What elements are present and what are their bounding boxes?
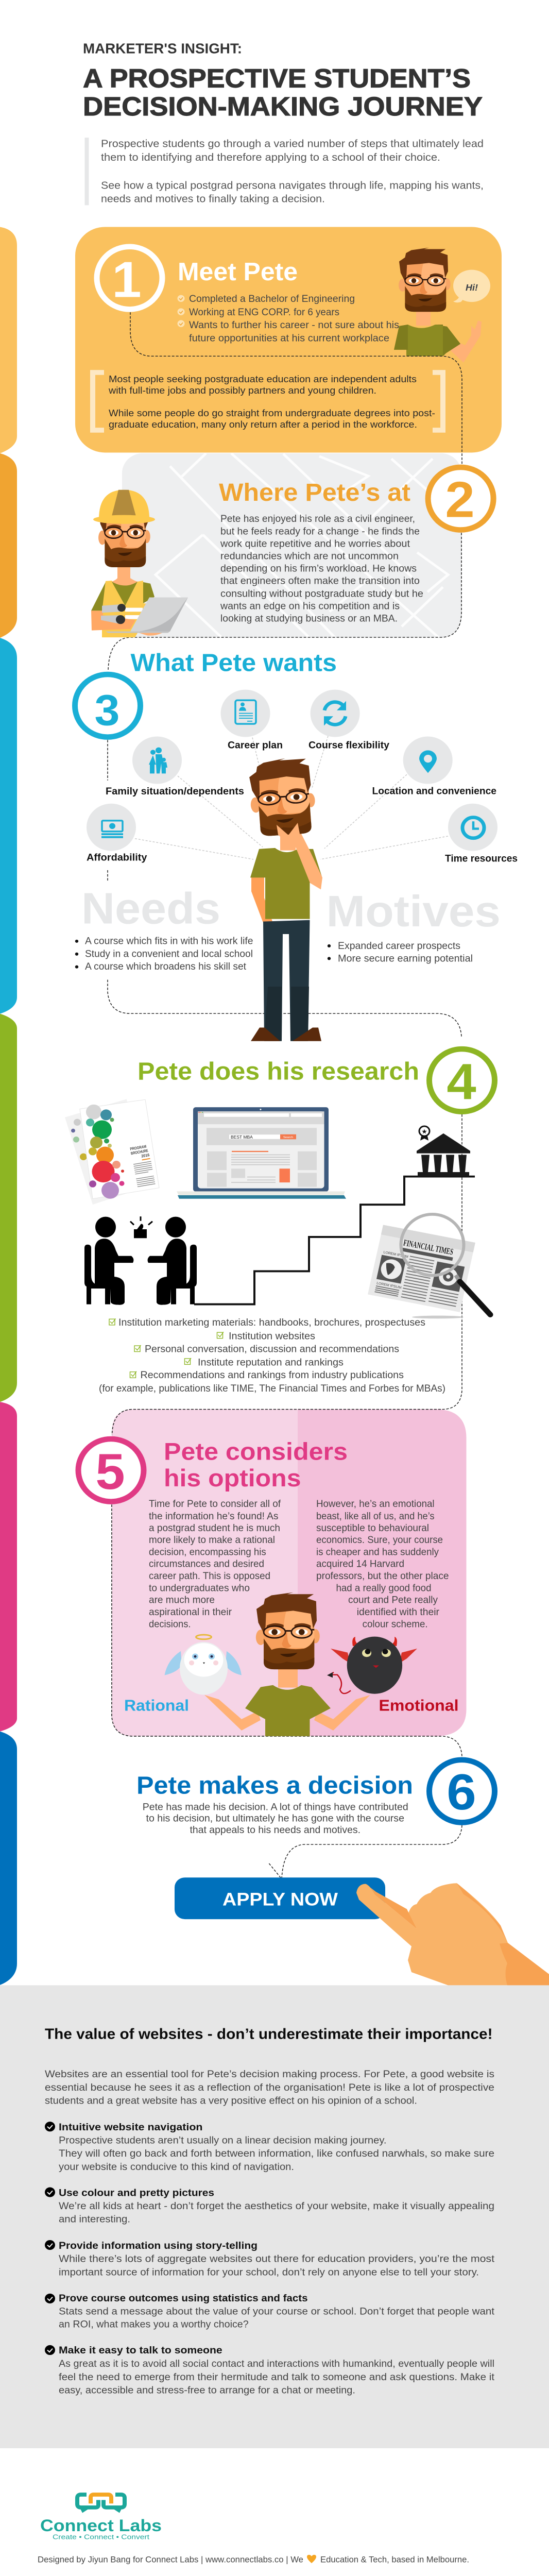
emotional text column [316,1498,449,1630]
item: statistics and facts: Stats send a message about the value of your course or school. Don’t forget that people want [59,2306,495,2317]
side tab: step 3 [0,638,17,1014]
rational text column: the information he’s found! As [149,1511,279,1522]
rational text column: decisions. [149,1619,191,1630]
label: emotional: Emotional [379,1697,459,1714]
motives list: Expanded career prospects [338,941,460,952]
brochure illustration [65,1099,159,1205]
research checklist: Institution marketing materials: handbooks, brochures, prospectuses [118,1317,425,1328]
step 6 badge [430,1760,494,1822]
side tab: step 4 [0,1014,17,1402]
item: talk to someone: Make it easy to talk to someone [59,2345,222,2356]
stairs line [194,1177,475,1304]
heading: where pete's at: Where Pete’s at [219,479,410,506]
item: intuitive navigation [45,2122,494,2173]
heading: pete considers his options [164,1439,348,1492]
emotional text column: professors, but the other place [316,1570,449,1582]
step 6 body text: Pete has made his decision. A lot of things have contributed [143,1802,408,1812]
apply now button [175,1877,385,1919]
main title [83,64,483,121]
emotional text column: had a really good food [336,1583,432,1594]
heading: pete makes a decision: Pete makes a decision [136,1772,413,1799]
institution building icon [417,1126,470,1177]
heading: pete does his research: Pete does his research [138,1058,419,1085]
step 2 body text: redundancies which are not uncommon [220,551,399,562]
pete facts list: future opportunities at his current workplace [189,333,389,344]
connector lines to wants [135,736,448,859]
heading: motives: Motives [327,887,501,936]
pete balancing illustration [204,1592,370,1736]
research checklist: Institute reputation and rankings [198,1357,344,1368]
speech bubble: Hi! [466,282,478,293]
rational text column: to undergraduates who [149,1583,250,1594]
institution building icon: ★ [421,1128,427,1135]
bracketed note: While some people do go straight from undergraduate degrees into post- [109,408,435,419]
heading: pete considers his options: his options [164,1465,301,1492]
laptop illustration: Search [283,1136,293,1139]
pointing hand [356,1883,549,1985]
step 4 badge: 4 [447,1054,476,1110]
intro text block [84,138,484,205]
side tab: step 1 [0,227,17,453]
emotional text column: court and Pete really [348,1595,438,1606]
panel: step 1 meet pete [75,227,502,452]
item: colour and pictures: Use colour and pretty pictures [59,2188,214,2198]
standing pete illustration [248,756,322,1041]
angel creature [165,1635,242,1694]
item: story-telling: While there’s lots of aggregate websites out there for education providers, you’re the most [59,2253,495,2264]
heading: needs: Needs [81,884,220,933]
item: story-telling: Provide information using story-telling [59,2241,258,2251]
intro text block: needs and motives to finally taking a decision. [101,193,325,205]
step 3 badge: 3 [95,686,119,735]
needs list: A course which broadens his skill set [85,961,247,972]
rational text column: circumstances and desired [149,1558,264,1569]
rational text column: decision, encompassing his [149,1547,266,1557]
side tab: step 6 [0,1732,17,1985]
footer credit: Designed by Jiyun Bang for Connect Labs | www.connectlabs.co | We [38,2555,303,2565]
pete facts list: Working at ENG CORP. for 6 years [189,307,339,318]
step 6 body text: that appeals to his needs and motives. [190,1824,361,1836]
people in conversation icon [84,1216,197,1305]
step 5 badge: 5 [95,1444,125,1500]
bracketed note: Most people seeking postgraduate education are independent adults [109,374,417,385]
item: colour and pictures: We’re all kids at heart - don’t forget the aesthetics of your website, make it visually appealing [59,2200,494,2212]
rational text column: are much more [149,1595,215,1606]
want: career plan: Career plan [228,740,283,751]
bracketed note: graduate education, many only return after a period in the workforce. [109,419,417,430]
want: time resources [445,804,518,865]
intro text block: See how a typical postgrad persona navigates through life, mapping his wants, [101,180,484,192]
emotional text column: beast, like all of us, and he’s [316,1511,435,1522]
step 6 body text [143,1802,408,1836]
step 2 body text: but he feels ready for a change - he finds the [220,526,420,537]
item: intuitive navigation: Prospective students aren’t usually on a linear decision making journey. [59,2135,386,2146]
heading: what pete wants: What Pete wants [131,650,337,676]
laptop illustration: BEST MBA [231,1134,253,1140]
websites intro paragraph: essential because he sees it as a reflection of the organisation! Pete is like a lot of prospective [45,2082,494,2093]
brochure illustration: BROCHURE [130,1148,148,1156]
heading: meet pete: Meet Pete [178,258,298,286]
side tab: step 5 [0,1402,17,1732]
emotional text column: is cheaper and has suddenly [316,1547,439,1557]
dashed path: step 1 to step 5 journey [108,312,462,1879]
engineer pete illustration [91,490,188,637]
newspaper and magnifier [368,1214,490,1318]
connect labs logo: Connect Labs [40,2517,162,2535]
apply now button: APPLY NOW [222,1889,338,1909]
main title: A PROSPECTIVE STUDENT’S [83,64,471,93]
rational text column: Time for Pete to consider all of [149,1498,281,1510]
heading: pete considers his options: Pete considers [164,1439,348,1465]
pete facts list: Wants to further his career - not sure about his [189,320,399,331]
bracketed note: with full-time jobs and possibly partners and young children. [108,385,376,396]
item: story-telling [45,2240,495,2278]
research checklist: Recommendations and rankings from industry publications [140,1370,404,1381]
pete facts list [177,293,399,344]
needs list: Study in a convenient and local school [85,948,253,959]
emotional text column: susceptible to behavioural [316,1522,429,1534]
item: intuitive navigation: your website is conducive to this kind of navigation. [59,2161,294,2173]
step 4 badge [430,1049,494,1112]
research checklist [99,1317,445,1394]
want: family situation [106,737,244,797]
item: statistics and facts: an ROI, what makes you a worthy choice? [59,2319,249,2330]
research checklist: Institution websites [229,1331,315,1342]
motives list: More secure earning potential [338,953,473,964]
bracketed note [93,372,443,430]
intro text block: Prospective students go through a varied number of steps that ultimately lead [101,138,484,149]
rational text column: more likely to make a rational [149,1534,275,1546]
footer credit: Education & Tech, based in Melbourne. [320,2555,469,2565]
step 2 body text: consulting without postgraduate study but he [220,588,423,599]
want: family situation: Family situation/dependents [106,786,244,797]
item: talk to someone [45,2345,495,2396]
rational text column: a postgrad student he is much [149,1522,280,1534]
item: intuitive navigation: Intuitive website navigation [59,2122,203,2133]
panel: value of websites [0,1985,549,2448]
websites intro paragraph [45,2069,494,2107]
rational text column: aspirational in their [149,1607,232,1618]
panel: step 2 blueprint background [122,453,461,641]
label: rational: Rational [124,1697,189,1714]
emotional text column: identified with their [357,1607,439,1618]
item: story-telling: important source of information for your school, don’t rely on anyone else to tell your story. [59,2267,479,2278]
item: talk to someone: feel the need to emerge from their hermitude and talk to someone and ask questions. Make it [59,2371,495,2383]
rational text column: career path. This is opposed [149,1570,270,1582]
item: talk to someone: As great as it is to avoid all social contact and interactions with humankind, eventually people will [59,2358,494,2369]
step 2 body text: wants an edge on his competition and is [220,601,400,612]
want: time resources: Time resources [445,853,518,865]
want: career plan [220,690,283,751]
step 2 body text: that engineers often make the transition into [220,575,420,587]
devil creature [327,1637,417,1694]
pete facts list: Completed a Bachelor of Engineering [189,293,355,304]
step 2 body text: Pete has enjoyed his role as a civil engineer, [220,513,415,524]
research checklist: Personal conversation, discussion and recommendations [145,1344,399,1354]
step 1 badge: 1 [112,251,142,308]
newspaper and magnifier: FINANCIAL TIMES [403,1238,454,1257]
connect labs logo [40,2495,162,2541]
want: location and convenience: Location and convenience [372,786,496,796]
connect labs logo: Create • Connect • Convert [53,2533,149,2541]
research checklist: (for example, publications like TIME, The Financial Times and Forbes for MBAs) [99,1383,445,1394]
pete illustration waving [394,248,482,363]
brochure illustration: PROGRAM [130,1144,147,1151]
step 6 badge: 6 [447,1764,476,1821]
want: course flexibility: Course flexibility [308,740,389,751]
want: course flexibility [308,690,389,751]
item: statistics and facts: Prove course outcomes using statistics and facts [59,2293,308,2304]
newspaper and magnifier: LOREM IPSUM [383,1250,409,1259]
step 2 badge: 2 [445,471,475,528]
main title: DECISION-MAKING JOURNEY [83,92,483,121]
want: affordability: Affordability [87,852,147,863]
newspaper and magnifier: LOREM IPSUM [376,1281,402,1290]
side tab: step 2 [0,453,17,638]
kicker heading: MARKETER'S INSIGHT: [83,41,242,57]
motives list [328,941,473,964]
item: statistics and facts [45,2293,495,2330]
footer credit [38,2555,469,2565]
websites intro paragraph: students and a great website has a very positive effect on his opinion of a school. [45,2095,417,2107]
needs list: A course which fits in with his work life [85,936,253,947]
intro text block: them to identifying and therefore applying to a school of their choice. [101,152,440,163]
laptop illustration [177,1107,346,1199]
item: colour and pictures [45,2188,494,2225]
step 2 body text [220,513,423,624]
step 1 badge [97,247,162,309]
step 6 body text: to his decision, but ultimately he has gone with the course [146,1813,404,1824]
want: affordability [87,804,147,863]
emotional text column: economics. Sure, your course [316,1534,443,1546]
step 2 badge [428,467,493,530]
step 2 body text: work quite repetitive and he worries about [220,538,410,549]
item: talk to someone: easy, accessible and stress-free to arrange for a chat or meeting. [59,2385,355,2396]
emotional text column: colour scheme. [363,1619,428,1630]
item: colour and pictures: and interesting. [59,2214,130,2225]
emotional text column: acquired 14 Harvard [316,1558,404,1569]
websites heading: The value of websites - don’t underestimate their importance! [45,2026,492,2042]
websites intro paragraph: Websites are an essential tool for Pete’s decision making process. For Pete, a good website is [45,2069,494,2080]
needs list [75,936,253,972]
step 3 badge [75,674,140,737]
panel: step 5 options [112,1410,467,1736]
step 5 badge [78,1439,144,1502]
rational text column [149,1498,281,1630]
step 2 body text: looking at studying business or an MBA. [220,613,398,624]
speech bubble [453,270,490,302]
item: intuitive navigation: They will often go back and forth between information, like confused narwhals, so make sure [59,2148,494,2159]
step 2 body text: depending on his firm’s workload. He knows [220,563,417,574]
brochure illustration: 2016 [141,1153,150,1159]
want: location and convenience [372,737,496,796]
emotional text column: However, he’s an emotional [316,1498,435,1510]
